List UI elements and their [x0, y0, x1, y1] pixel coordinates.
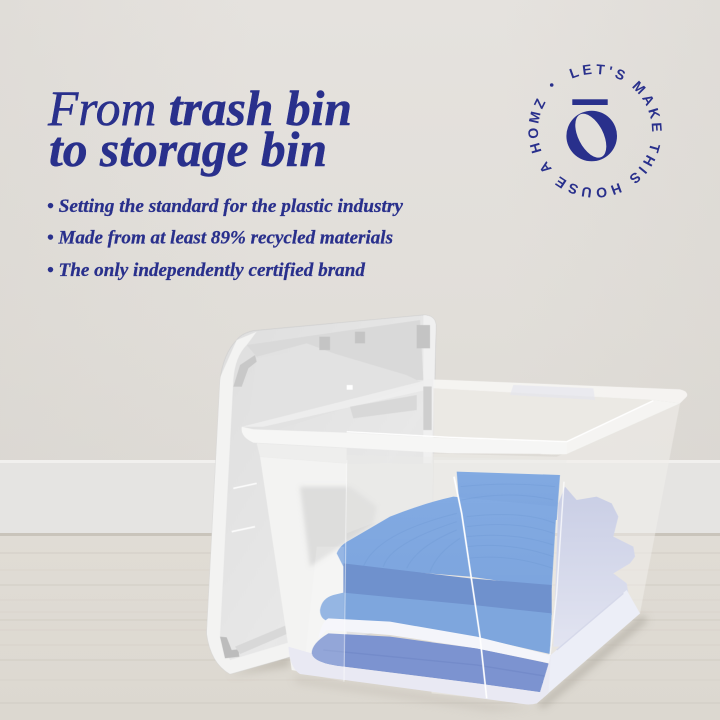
- ghost clothes behind panel: [300, 487, 377, 567]
- lid left rim strip: [206, 332, 290, 674]
- right front rim: [540, 400, 680, 454]
- bullet: certified: • The only independently certified brand: [47, 260, 366, 281]
- title second line: to storage bin: [49, 121, 327, 177]
- bin body: [288, 460, 564, 705]
- floor shadow: [230, 615, 648, 712]
- bullet: recycled: • Made from at least 89% recycled materials: [47, 228, 393, 248]
- bin lid: [203, 315, 436, 677]
- bin right side panel: [432, 403, 680, 703]
- icon: logo letter o: [566, 109, 617, 163]
- back sweater: [457, 472, 560, 520]
- folded clothes stack: [312, 472, 640, 703]
- interior right of lid: [433, 388, 653, 442]
- white block at right: [537, 590, 640, 703]
- second dark layer: [343, 563, 552, 615]
- seam overlay on clothes: [303, 547, 344, 682]
- bin rim: [241, 378, 687, 463]
- lavender clothes behind side panel: [553, 487, 635, 647]
- rim ribs: [257, 443, 347, 463]
- lid corner clips: [233, 355, 257, 387]
- separator dot: [550, 83, 554, 87]
- icon: logo bar: [572, 99, 608, 105]
- bin panel seen through: lid interior area: [338, 463, 432, 680]
- bin left front panel: [260, 457, 347, 680]
- circular slogan: LET'S MAKE THIS HOUSE A HOMZ: [528, 64, 662, 198]
- bottom dark layer: [312, 633, 548, 693]
- back right rim: [433, 379, 687, 403]
- front rim: [241, 427, 567, 454]
- storage bin product: [203, 315, 687, 712]
- white folded layer: [318, 618, 550, 663]
- bin bottom tray: [288, 647, 548, 705]
- lid top frame: [291, 320, 424, 380]
- bullet: standard: • Setting the standard for the plastic industry: [47, 196, 404, 217]
- back left rim: [242, 378, 433, 427]
- circular logo badge: [528, 64, 662, 198]
- sweater ribbing: [363, 484, 555, 572]
- area between rim and clothes: [347, 455, 567, 533]
- third light layer: [320, 593, 552, 654]
- background: wall: [0, 0, 720, 461]
- bin front corner highlight: [454, 477, 487, 698]
- title: From trash bin: [47, 80, 352, 136]
- background: wooden floor: [0, 536, 720, 720]
- bullet list: [47, 196, 404, 281]
- top sweater ribbed: [337, 497, 557, 588]
- background: baseboard: [0, 460, 720, 536]
